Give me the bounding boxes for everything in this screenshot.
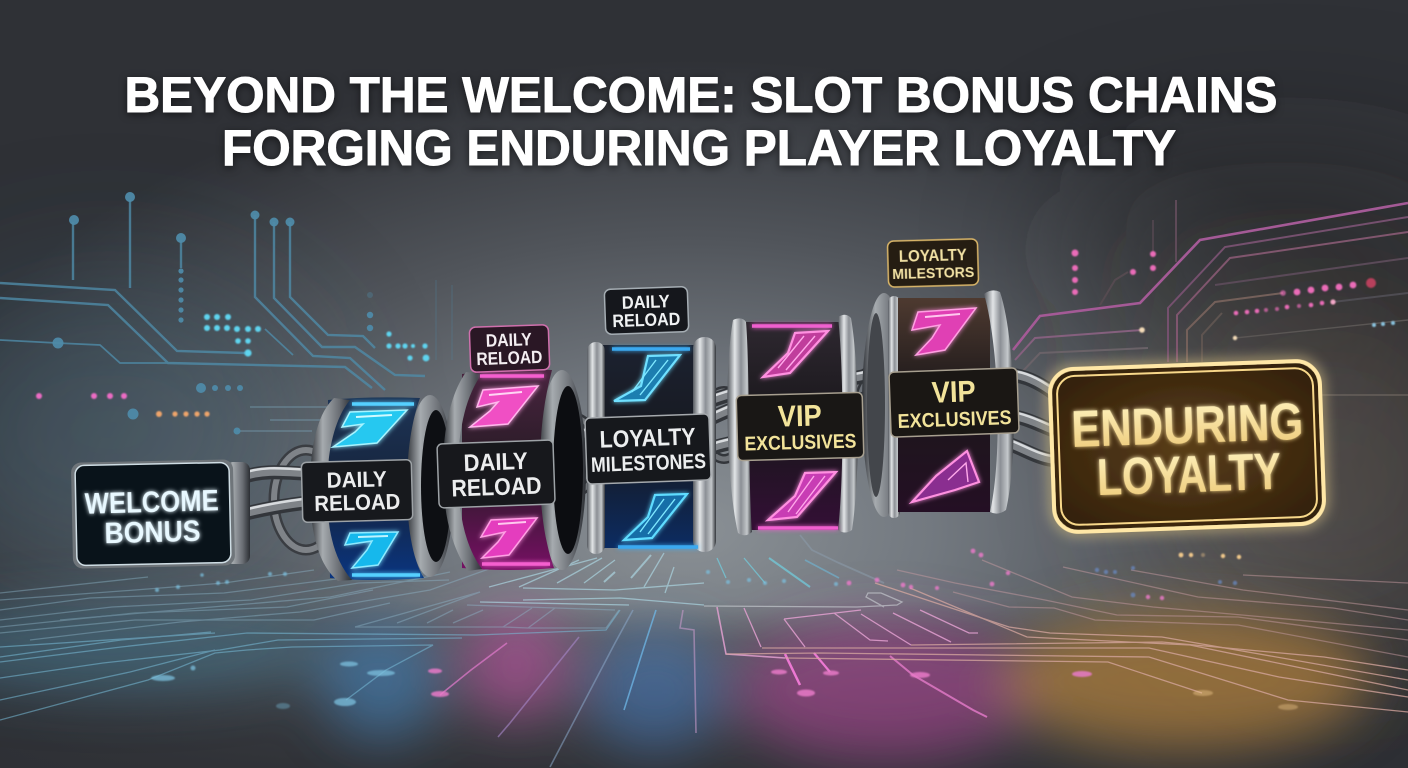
circuit traces: right pink — [1013, 200, 1408, 395]
callout inner line — [1056, 368, 1318, 525]
label: daily reload, reel 2: RELOAD — [451, 472, 542, 503]
label: loyalty milestones: LOYALTY — [599, 423, 696, 454]
chain tubes shadow — [236, 372, 1052, 516]
reel 4 drum — [740, 322, 846, 530]
reel 5 arrow bottom — [912, 451, 979, 502]
welcome bonus plate — [71, 459, 235, 569]
reel 5 drum — [898, 298, 990, 512]
label: daily reload, pink top tag — [469, 325, 550, 372]
reel 2 right wheel — [538, 370, 586, 570]
reel 2 neon bars — [480, 376, 550, 564]
side colour tints — [0, 160, 1408, 650]
reel 2 left rim — [443, 372, 482, 571]
label: daily reload, pink top tag: RELOAD — [476, 347, 543, 369]
label: vip exclusives, reel 5: EXCLUSIVES — [897, 407, 1012, 433]
reel 4 left rim — [727, 318, 752, 535]
label: daily reload, reel 1: DAILY — [326, 466, 387, 493]
reel 5: gold and pink — [862, 290, 1014, 518]
reel 1 neon bars — [352, 404, 420, 575]
label: vip exclusives, reel 4: EXCLUSIVES — [744, 431, 857, 455]
reel 2 seven bottom — [481, 518, 537, 558]
reel 5 right rim — [984, 290, 1014, 514]
circuit dots: right — [1072, 250, 1395, 340]
floor dots — [151, 549, 1298, 710]
title: FORGING ENDURING PLAYER LOYALTY — [222, 120, 1176, 176]
label: loyalty milestones — [585, 414, 711, 484]
reel 3 drum — [598, 345, 700, 548]
reel 1 drum — [328, 397, 424, 580]
reel 5 neon bars — [895, 300, 982, 509]
label: daily reload, blue top tag: RELOAD — [612, 309, 681, 331]
title — [124, 67, 1278, 176]
reel 3 neon bars — [612, 349, 698, 547]
reel 2 seven top — [470, 386, 538, 427]
reel 1 left rim — [310, 398, 352, 581]
reel 1 seven top — [333, 410, 407, 447]
label: vip exclusives, reel 5 — [889, 368, 1019, 437]
reel 3 seven top — [614, 355, 680, 401]
welcome bonus text: BONUS — [104, 515, 201, 550]
floor colour glows — [0, 605, 1370, 760]
welcome bonus text — [84, 484, 220, 551]
label: daily reload, reel 1: RELOAD — [314, 489, 401, 516]
label: daily reload, blue top tag — [604, 287, 689, 334]
label: daily reload, reel 1 — [301, 460, 413, 522]
label: vip exclusives, reel 5: VIP — [931, 375, 976, 410]
label: welcome bonus — [71, 459, 250, 569]
reel 1 right wheel — [406, 395, 454, 577]
title: BEYOND THE WELCOME: SLOT BONUS CHAINS — [124, 67, 1278, 123]
reel 4 seven bottom — [768, 472, 836, 520]
circuit floor traces — [0, 535, 1408, 767]
reel 3 right rim — [693, 337, 716, 552]
chain links — [236, 368, 1052, 550]
reel 3 left rim — [587, 342, 605, 554]
label: loyalty milestones: MILESTONES — [591, 450, 706, 477]
callout glow frame — [1049, 360, 1325, 533]
chain rings — [274, 371, 892, 550]
label: daily reload, pink top tag: DAILY — [485, 329, 532, 351]
reel 2: pink — [443, 370, 586, 571]
reel 4 seven top — [763, 331, 828, 377]
label: daily reload, blue top tag: DAILY — [621, 291, 670, 313]
reel 5 left wheel — [862, 293, 906, 518]
label: loyalty milestors tag: MILESTORS — [892, 264, 974, 283]
reel 3 seven bottom — [624, 494, 687, 540]
reel 3: blue — [587, 337, 716, 554]
reel 2 drum — [462, 370, 554, 570]
welcome bonus metal side — [225, 462, 250, 564]
label: daily reload, reel 2 — [437, 440, 555, 508]
reel 4: pink — [727, 315, 858, 535]
callout text — [1070, 393, 1306, 508]
label: vip exclusives, reel 4: VIP — [777, 399, 822, 434]
label: vip exclusives, reel 4 — [736, 392, 864, 461]
welcome bonus text: WELCOME — [84, 484, 219, 521]
label: loyalty milestors tag: LOYALTY — [899, 245, 968, 266]
reel 1 seven bottom — [345, 532, 398, 568]
label: loyalty milestors tag — [887, 239, 979, 287]
chain tubes highlight — [236, 368, 1052, 512]
reel 4 neon bars — [752, 326, 838, 528]
reel 4 right rim — [838, 315, 858, 532]
chain tubes body — [236, 371, 1052, 515]
circuit traces: left blue — [0, 200, 452, 431]
label: daily reload, reel 2: DAILY — [463, 448, 528, 477]
callout text: LOYALTY — [1096, 443, 1282, 507]
reel 1: blue — [310, 395, 454, 581]
circuit dots: left — [36, 192, 429, 434]
callout text: ENDURING — [1070, 393, 1304, 459]
callout: enduring loyalty — [1049, 360, 1325, 533]
reel 5 seven top — [912, 308, 976, 355]
